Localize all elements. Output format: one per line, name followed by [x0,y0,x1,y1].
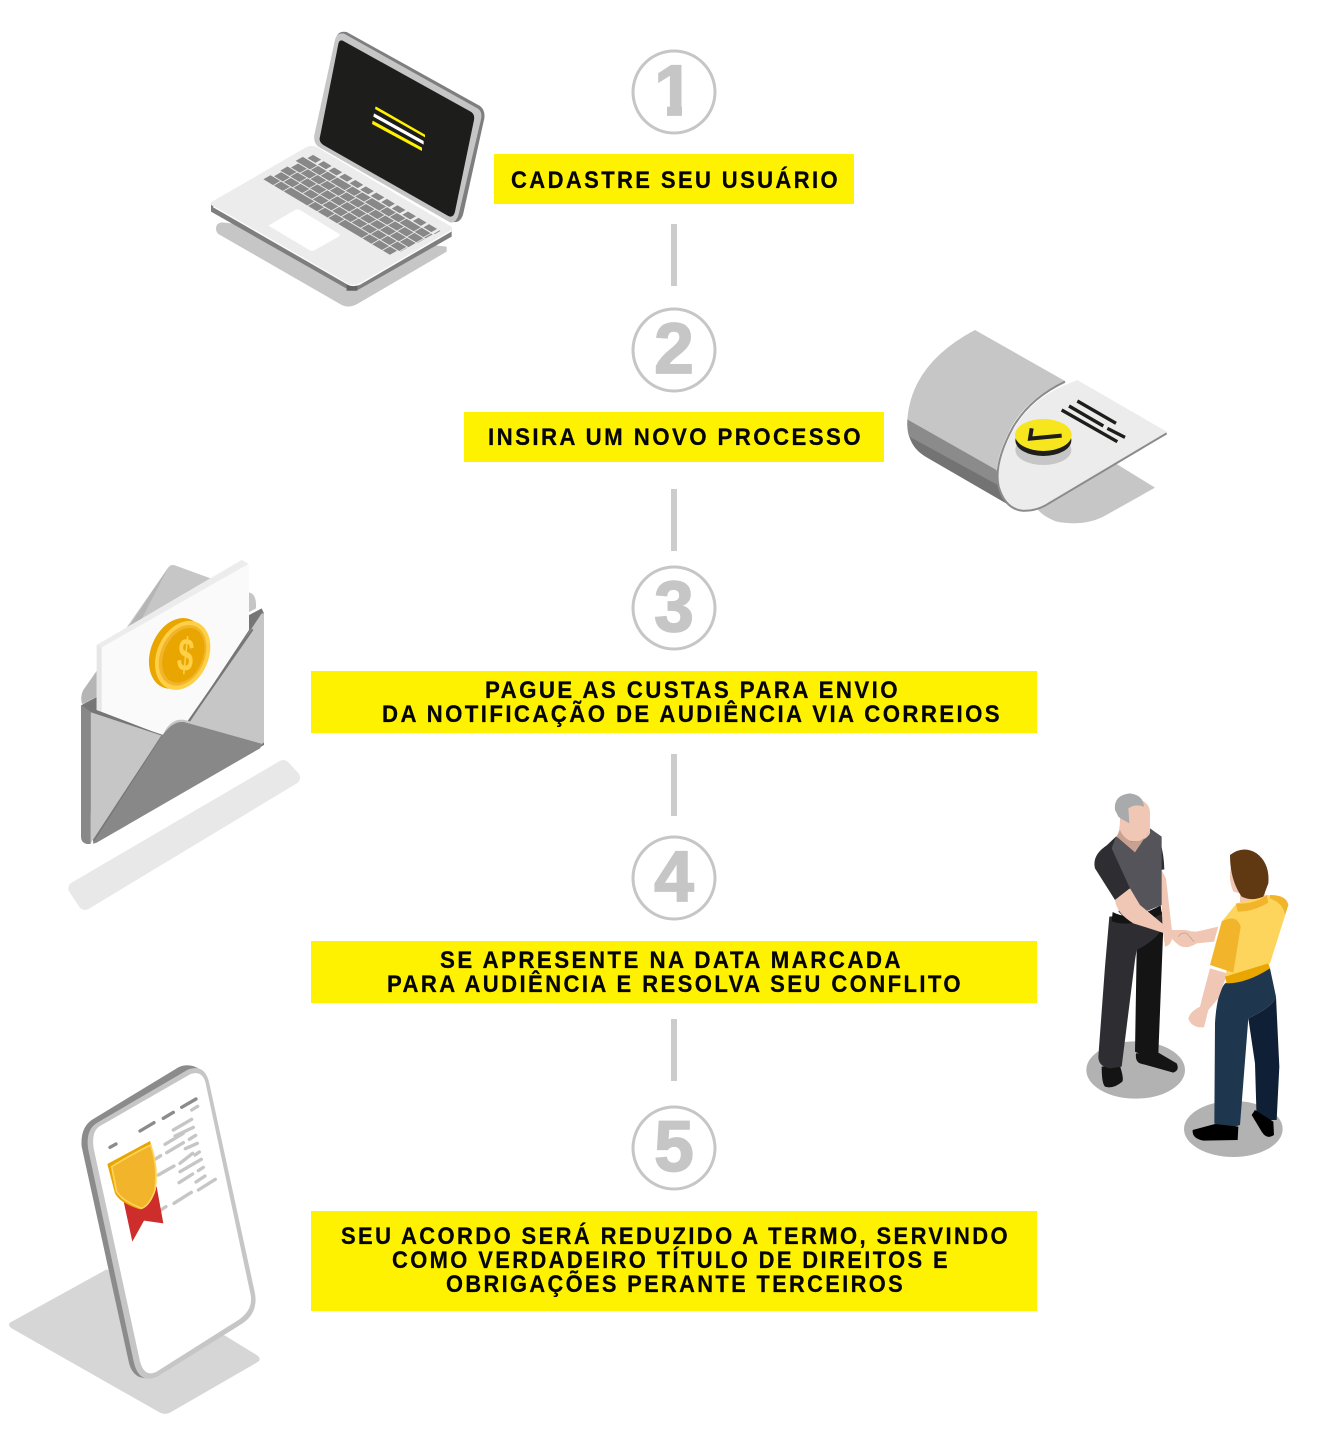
step 4: number badge [633,837,715,919]
step 5: label [311,1211,1037,1311]
step 2: number badge: 2 [654,310,694,389]
icon: document with yellow check seal [907,330,1167,523]
step 4: number badge: 4 [654,838,694,917]
step 2: number badge [633,309,715,391]
step 3: label [311,671,1037,733]
step 1: label: CADASTRE SEU USUÁRIO [511,166,840,194]
step 4: label: PARA AUDIÊNCIA E RESOLVA SEU CONFLITO [387,970,963,998]
step 3: number badge: 3 [654,568,694,647]
step 4: label [311,941,1037,1003]
step 1: label [494,154,854,204]
step 5: label: COMO VERDADEIRO TÍTULO DE DIREITOS E [392,1246,950,1274]
connector 4 to 5 [671,1019,677,1081]
step 2: label: INSIRA UM NOVO PROCESSO [488,424,863,451]
step 1: number badge: 1 [654,52,694,131]
connector 1 to 2 [671,224,677,286]
connector 2 to 3 [671,489,677,551]
icon: laptop [211,32,484,307]
icon: envelope with coin: $ [175,629,197,682]
step 3: label: PAGUE AS CUSTAS PARA ENVIO [485,677,900,704]
step 3: number badge [633,567,715,649]
connector 3 to 4 [671,754,677,816]
step 5: label: SEU ACORDO SERÁ REDUZIDO A TERMO, SERVINDO [341,1222,1010,1250]
step 5: number badge [633,1107,715,1189]
step 5: number badge: 5 [654,1108,694,1187]
step 2: label [464,412,884,462]
step 3: label: DA NOTIFICAÇÃO DE AUDIÊNCIA VIA CORREIOS [382,700,1002,728]
icon: two people shaking hands [1086,793,1288,1157]
icon: envelope with coin [75,560,293,903]
step 5: label: OBRIGAÇÕES PERANTE TERCEIROS [446,1270,905,1298]
step 1: number badge [633,51,715,133]
icon: phone with certificate seal [9,1065,260,1414]
step 4: label: SE APRESENTE NA DATA MARCADA [440,947,903,974]
